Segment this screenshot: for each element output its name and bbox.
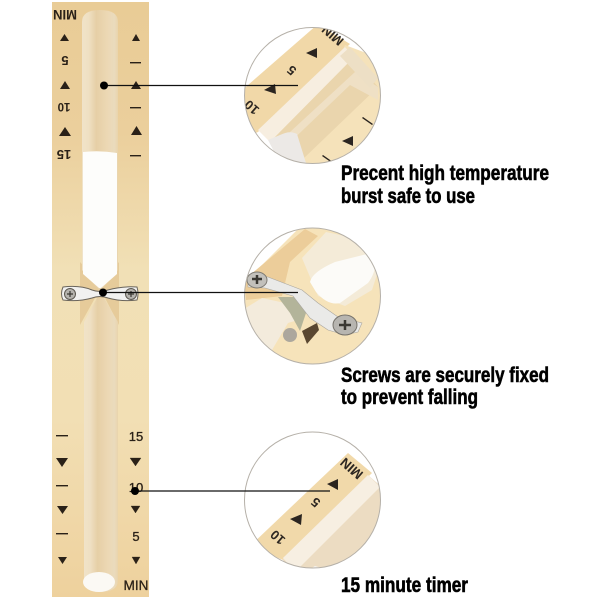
circle outline (244, 228, 380, 364)
caption 2: Screws are securely fixed (341, 364, 549, 387)
top left scale (53, 7, 77, 162)
callout line 2 (99, 288, 298, 296)
screw (247, 272, 267, 288)
detail circle: timer scale: 5 (308, 494, 323, 510)
scale markings: 5 (284, 62, 299, 78)
scale markings: 10 (241, 97, 262, 118)
detail circle: glass tube (245, 28, 380, 163)
lower screw (283, 328, 297, 342)
screw (333, 315, 357, 335)
scale markings (241, 22, 373, 163)
callout line 3 (131, 487, 330, 495)
caption 1: Precent high temperature (341, 162, 549, 185)
glass tube upper (82, 10, 118, 290)
caption 2: to prevent falling (341, 386, 478, 409)
scale markings: MIN (319, 22, 347, 49)
top left scale: MIN (53, 7, 77, 22)
circle outline (244, 432, 380, 568)
top left scale: 15 (57, 147, 71, 162)
caption 3: 15 minute timer (341, 574, 468, 597)
bottom left scale (56, 435, 68, 564)
detail circle: timer scale (258, 453, 380, 568)
glass tube lower (84, 298, 118, 592)
bottom right scale: MIN (124, 578, 148, 593)
detail circle: metal strap (244, 227, 381, 364)
caption 1: burst safe to use (341, 185, 475, 208)
hourglass timer (52, 2, 149, 597)
callout line 1 (100, 82, 298, 90)
white sand lower (83, 572, 115, 592)
detail circle: timer scale: 10 (267, 527, 288, 548)
bottom right scale: 15 (129, 429, 143, 444)
metal strap (62, 286, 138, 301)
circle outline (244, 28, 380, 164)
caption 1 (341, 162, 549, 208)
steel strap (248, 275, 362, 335)
bottom right scale (124, 429, 148, 593)
groove taper near the neck (80, 262, 119, 325)
top left scale: 5 (61, 53, 69, 68)
wooden frame (52, 2, 149, 597)
top right scale (130, 34, 142, 156)
top left scale: 10 (58, 100, 70, 112)
detail circle: timer scale: MIN (337, 455, 366, 482)
white sand upper (83, 151, 117, 288)
bottom right scale: 5 (132, 529, 140, 544)
bottom right scale: 10 (129, 480, 143, 495)
caption 2 (341, 364, 549, 409)
